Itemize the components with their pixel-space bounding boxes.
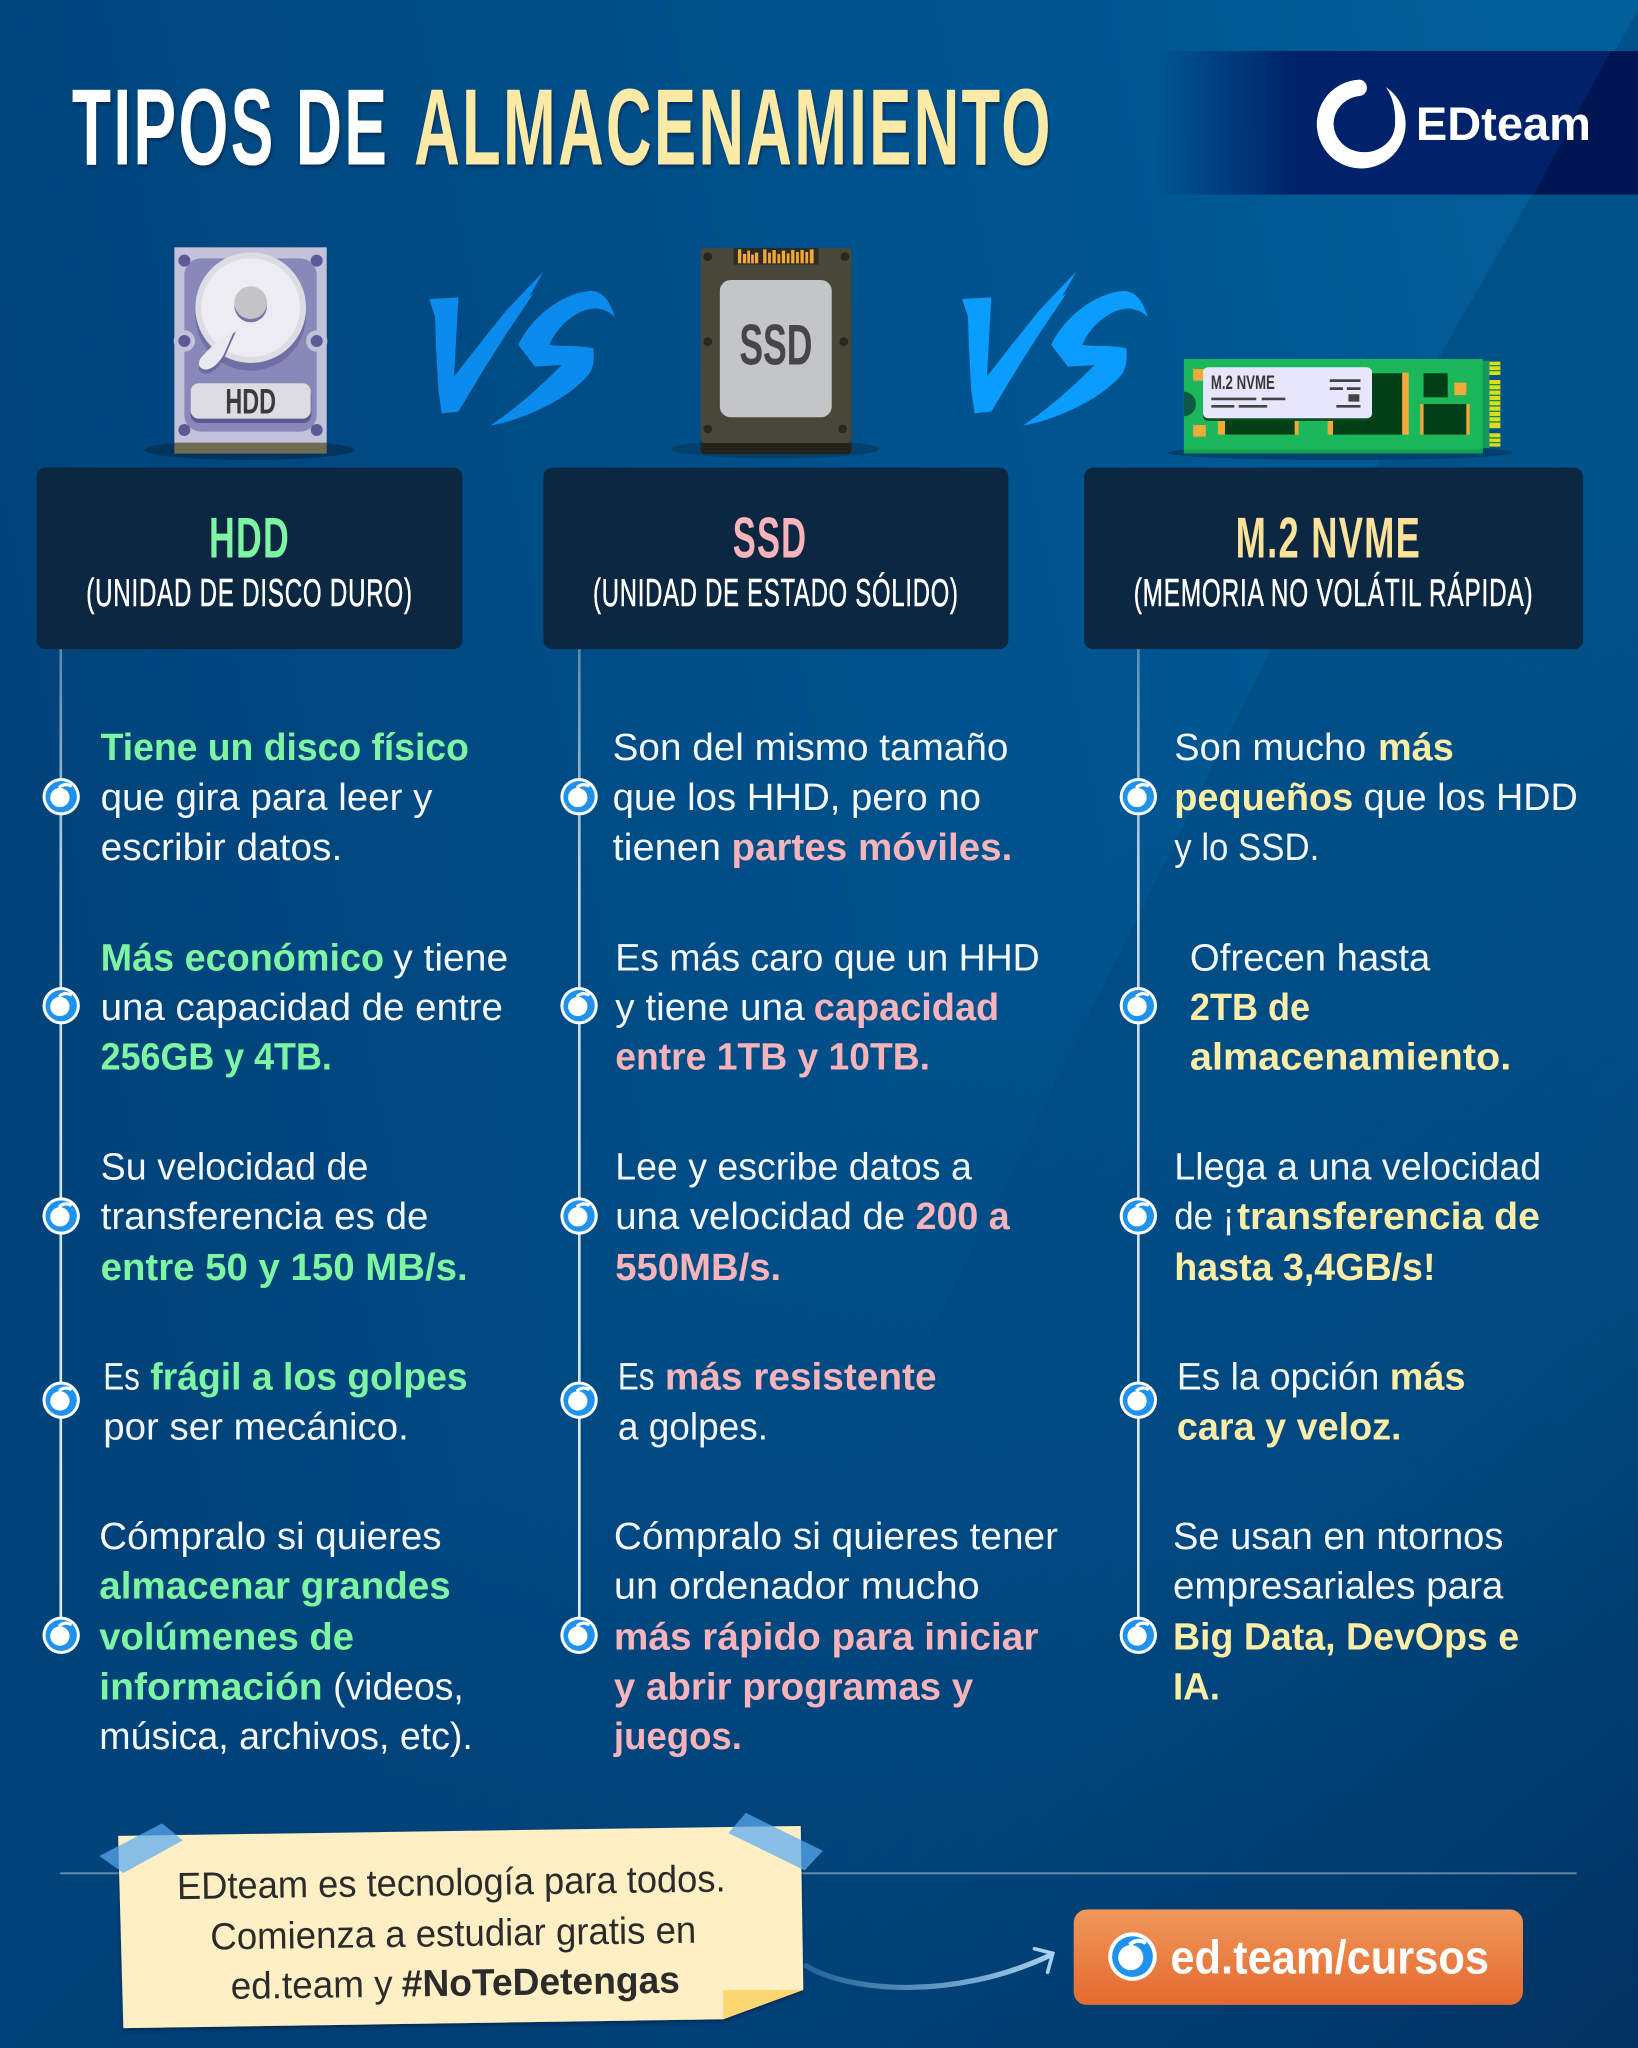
HDD text 4: frágil a los golpes [150,1357,468,1399]
HDD text 1: escribir datos. [101,827,342,869]
SSD text 5: juegos. [613,1716,742,1758]
HDD text 5: (videos, [333,1666,464,1708]
SSD text 4: a golpes. [618,1406,768,1448]
call to action button [1074,1910,1523,2005]
SSD text 5 [613,1516,1058,1758]
header: SSD: SSD [733,507,807,571]
NVME text 1: que los HDD [1364,777,1578,819]
NVME text 3: hasta 3,4GB/s! [1174,1247,1435,1289]
HDD text 1: Tiene un disco físico [101,727,469,769]
HDD text 1 [101,727,469,869]
HDD text 2: una capacidad de entre [101,987,503,1029]
SSD text 4: más resistente [665,1357,937,1399]
header: HDD: HDD [209,507,290,571]
SSD text 2: capacidad [814,987,999,1029]
NVME text 5: Se usan en ntornos [1173,1516,1503,1558]
SSD text 5: Cómpralo si quieres tener [614,1516,1058,1558]
timeline: HDD [43,649,80,1654]
NVME text 1: pequeños [1174,777,1353,819]
icon: HDD: HDD [225,382,276,421]
NVME text 2: 2TB de [1190,987,1310,1029]
timeline: SSD [560,649,598,1654]
title [72,67,1053,188]
SSD text 3: 550MB/s. [615,1247,781,1289]
NVME text 4: cara y veloz. [1177,1406,1402,1448]
HDD text 4: Es [103,1357,140,1399]
NVME text 3: Llega a una velocidad [1174,1146,1541,1188]
HDD text 5: volúmenes de [99,1617,354,1659]
SSD text 5: un ordenador mucho [614,1566,980,1608]
NVME text 5 [1173,1516,1519,1708]
icon: SSD: SSD [739,313,812,377]
NVME text 4 [1177,1357,1466,1448]
SSD text 4 [618,1357,937,1448]
NVME text 5: IA. [1173,1666,1220,1708]
header: HDD: (UNIDAD DE DISCO DURO) [86,572,413,615]
NVME text 3 [1174,1146,1541,1289]
header: M.2 NVME [1084,468,1583,649]
call to action button: ed.team/cursos [1170,1931,1489,1984]
sticky note [118,1826,803,2028]
SSD text 1 [613,727,1012,869]
arrow [806,1949,1053,1987]
NVME text 4: Es la opción [1177,1357,1379,1399]
NVME text 4: más [1390,1357,1466,1399]
HDD text 3: Su velocidad de [101,1146,368,1188]
NVME text 3: transferencia de [1237,1196,1540,1238]
SSD text 5: más rápido para iniciar [614,1617,1039,1659]
timeline: M.2 NVME [1120,649,1157,1654]
title: TIPOS DE [72,67,389,188]
HDD text 4 [103,1357,468,1448]
SSD text 1: tienen [613,827,721,869]
icon: HDD [144,247,354,460]
NVME text 1: y lo SSD. [1174,827,1319,869]
SSD text 1: partes móviles. [731,827,1012,869]
HDD text 5 [99,1516,473,1758]
HDD text 2: 256GB y 4TB. [101,1037,332,1079]
HDD text 2 [101,937,508,1079]
SSD text 2: entre 1TB y 10TB. [615,1037,930,1079]
NVME text 3: de ¡ [1174,1196,1234,1238]
header: M.2 NVME: M.2 NVME [1236,507,1421,571]
SSD text 2 [615,937,1040,1079]
SSD text 5: y abrir programas y [614,1666,973,1708]
header: SSD [543,468,1008,649]
HDD text 2: Más económico [101,937,384,979]
logo band [1156,51,1638,195]
NVME text 1 [1174,727,1578,869]
NVME text 2: Ofrecen hasta [1190,937,1431,979]
header: SSD: (UNIDAD DE ESTADO SÓLIDO) [593,572,959,615]
HDD text 1: que gira para leer y [101,777,432,819]
SSD text 1: que los HHD, pero no [613,777,981,819]
SSD text 2: Es más caro que un HHD [615,937,1040,979]
HDD text 4: por ser mecánico. [103,1406,409,1448]
NVME text 2: almacenamiento. [1190,1037,1511,1079]
footer divider [60,1872,1577,1874]
SSD text 4: Es [618,1357,654,1399]
logo: EDteam [1317,80,1591,168]
NVME text 1: más [1378,727,1454,769]
tape left [99,1823,183,1873]
HDD text 5: información [99,1666,323,1708]
HDD text 3 [101,1146,468,1289]
HDD text 3: transferencia es de [101,1196,428,1238]
icon: M.2 NVMe: M.2 NVME [1211,372,1275,394]
header: HDD [37,468,462,649]
HDD text 5: Cómpralo si quieres [99,1516,442,1558]
NVME text 1: Son mucho [1174,727,1366,769]
SSD text 3 [615,1146,1011,1289]
HDD text 3: entre 50 y 150 MB/s. [101,1247,468,1289]
NVME text 5: empresariales para [1173,1566,1504,1608]
sticky note: EDteam es tecnología para todos. [177,1858,726,1908]
logo: EDteam: EDteam [1416,97,1591,150]
NVME text 2 [1190,937,1511,1079]
sticky note: ed.team y [230,1964,393,2008]
HDD text 5: almacenar grandes [99,1566,451,1608]
sticky note: #NoTeDetengas [401,1960,680,2006]
NVME text 5: Big Data, DevOps e [1173,1617,1519,1659]
SSD text 3: una velocidad de [615,1196,905,1238]
SSD text 2: y tiene una [615,987,806,1029]
HDD text 2: y tiene [393,937,508,979]
icon: VS 1 [429,272,615,426]
SSD text 1: Son del mismo tamaño [613,727,1008,769]
SSD text 3: 200 a [916,1196,1011,1238]
sticky note: Comienza a estudiar gratis en [210,1910,697,1959]
tape right [728,1813,823,1870]
HDD text 5: música, archivos, etc). [99,1716,473,1758]
SSD text 3: Lee y escribe datos a [615,1146,973,1188]
icon: SSD [671,248,879,458]
icon: M.2 NVMe [1167,359,1513,460]
icon: VS 2 [962,272,1148,426]
title: ALMACENAMIENTO [414,67,1053,188]
